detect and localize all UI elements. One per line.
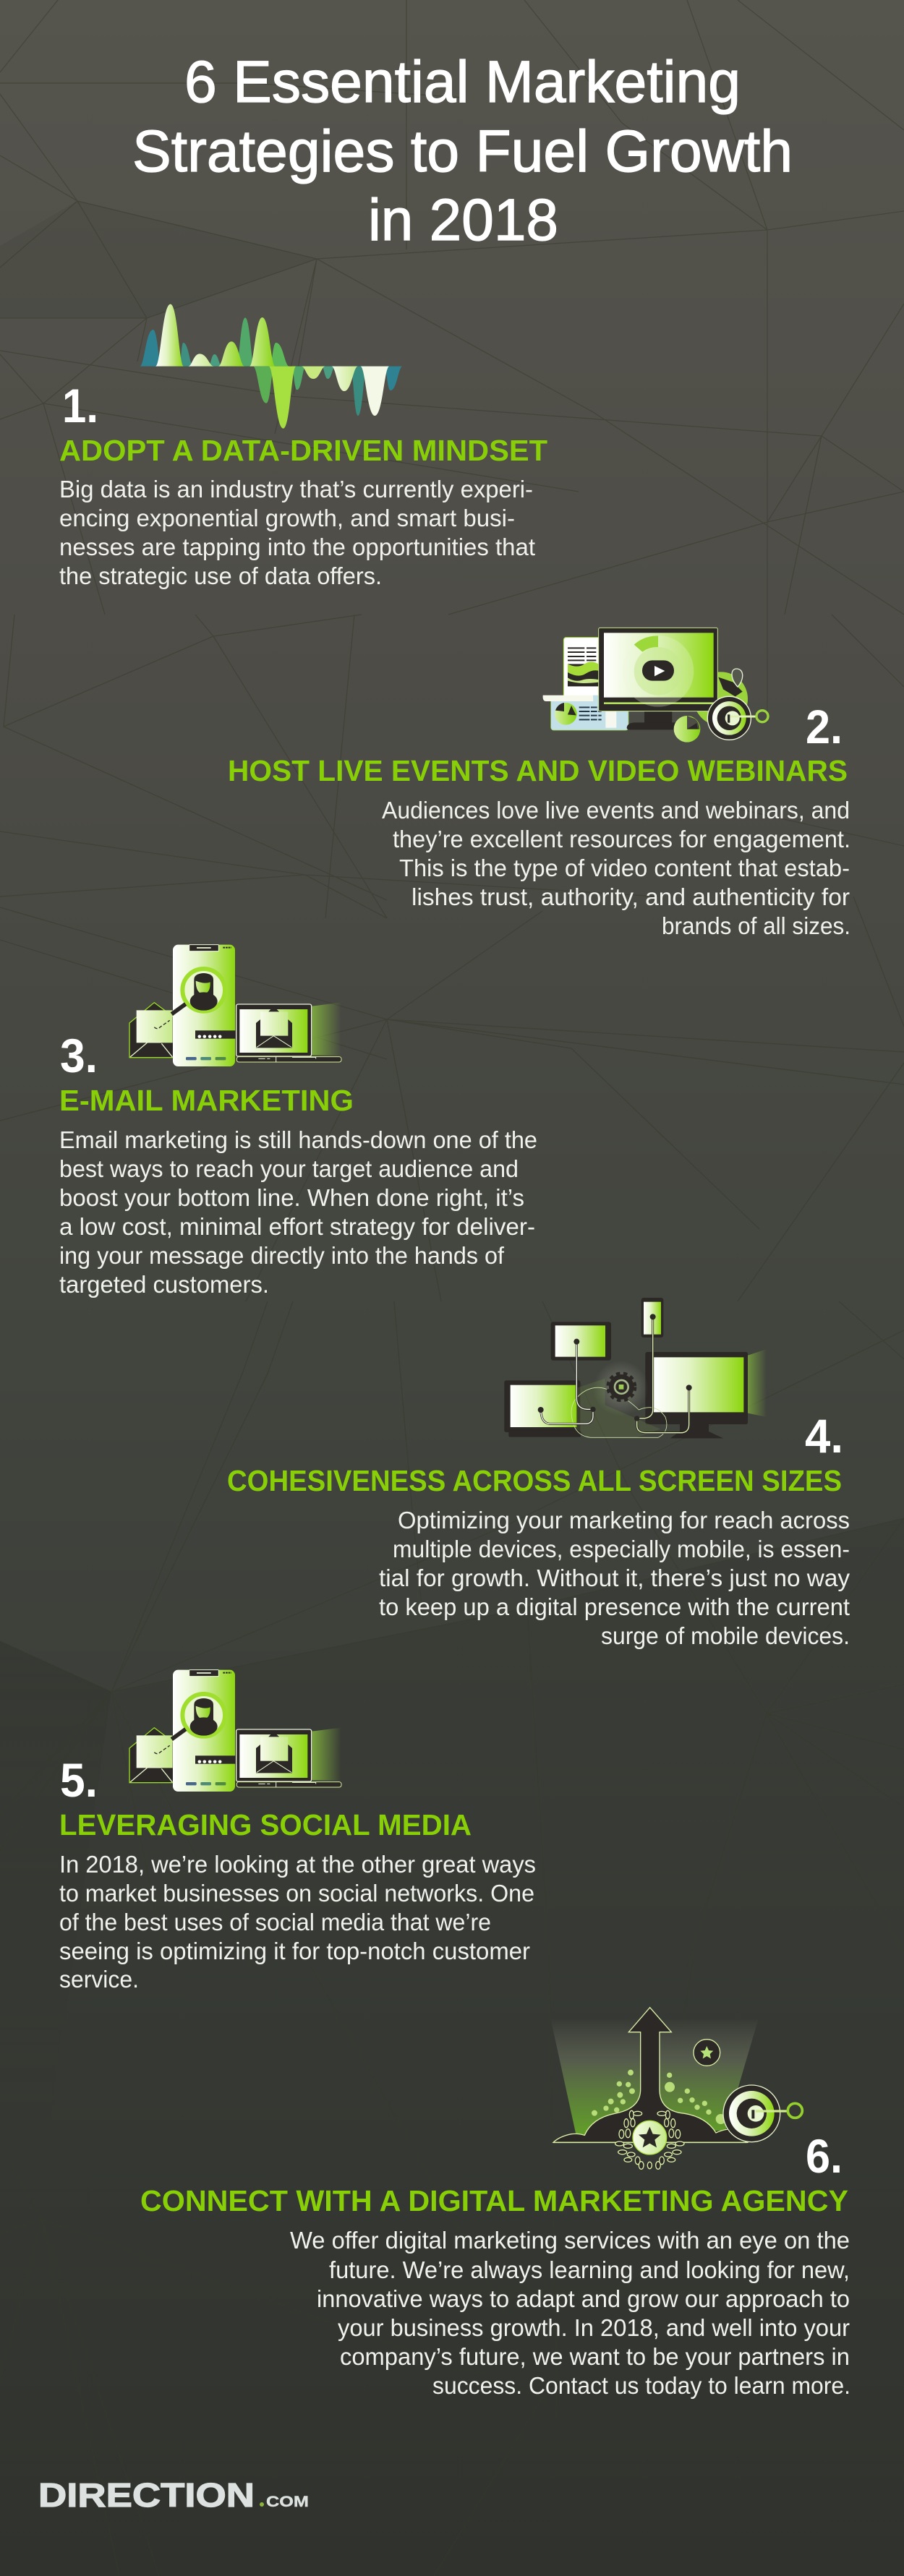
body 2	[382, 797, 850, 939]
body 3: targeted customers.	[59, 1271, 269, 1298]
body 4: tial for growth. Without it, there’s just no way	[379, 1565, 850, 1591]
body 6: company’s future, we want to be your partners in	[340, 2343, 850, 2370]
number 5: 5.	[60, 1753, 98, 1807]
icon: phone and email envelopes repeat	[129, 1670, 341, 1792]
title: Strategies to Fuel Growth	[132, 119, 793, 184]
body 4	[379, 1507, 850, 1649]
heading 6: CONNECT WITH A DIGITAL MARKETING AGENCY	[140, 2184, 848, 2217]
body 3: best ways to reach your target audience and	[59, 1155, 519, 1182]
body 3: Email marketing is still hands-down one of the	[59, 1126, 537, 1153]
body 3: a low cost, minimal effort strategy for deliver-	[59, 1213, 535, 1240]
title	[132, 49, 793, 253]
icon: phone and email envelopes	[129, 945, 341, 1066]
body 5	[59, 1851, 536, 1993]
panel: section 6 agency	[140, 2008, 850, 2399]
body 2: This is the type of video content that estab-	[399, 855, 850, 881]
icon: data waveform	[140, 304, 403, 429]
body 2: lishes trust, authority, and authenticity for	[412, 883, 850, 910]
panel: section 4 screen sizes	[227, 1298, 850, 1649]
body 6: your business growth. In 2018, and well into your	[338, 2314, 850, 2341]
body 5: seeing is optimizing it for top-notch customer	[59, 1938, 530, 1964]
body 6: future. We’re always learning and looking for new,	[329, 2256, 850, 2283]
body 5: service.	[59, 1966, 139, 1993]
number 4: 4.	[805, 1409, 843, 1463]
body 5: to market businesses on social networks. One	[59, 1880, 534, 1907]
heading 5: LEVERAGING SOCIAL MEDIA	[59, 1808, 472, 1841]
panel: section 3 email marketing	[59, 945, 537, 1298]
body 6	[290, 2227, 850, 2399]
logo: direction.com: DIRECTION	[38, 2476, 255, 2514]
body 2: Audiences love live events and webinars, and	[382, 797, 850, 823]
heading 4: COHESIVENESS ACROSS ALL SCREEN SIZES	[227, 1464, 842, 1497]
body 6: We offer digital marketing services with an eye on the	[290, 2227, 850, 2254]
number 3: 3.	[60, 1029, 98, 1082]
title: 6 Essential Marketing	[184, 49, 741, 115]
heading 1: ADOPT A DATA-DRIVEN MINDSET	[59, 434, 547, 467]
heading 2: HOST LIVE EVENTS AND VIDEO WEBINARS	[228, 754, 848, 787]
body 2: brands of all sizes.	[662, 912, 850, 939]
icon part: wreath	[615, 2110, 684, 2169]
icon: connected screens	[504, 1298, 767, 1438]
panel: section 5 social media	[59, 1670, 536, 1993]
logo: direction.com	[38, 2476, 309, 2514]
body 4: multiple devices, especially mobile, is essen-	[393, 1536, 850, 1562]
number 6: 6.	[806, 2129, 843, 2183]
body 3: boost your bottom line. When done right, it’s	[59, 1184, 524, 1211]
body 3	[59, 1126, 537, 1298]
number 2: 2.	[806, 700, 843, 753]
body 1: Big data is an industry that’s currently experi-	[59, 476, 533, 502]
body 1: encing exponential growth, and smart busi-	[59, 505, 515, 531]
body 5: In 2018, we’re looking at the other great ways	[59, 1851, 536, 1878]
body 1: nesses are tapping into the opportunities that	[59, 534, 535, 560]
body 4: Optimizing your marketing for reach across	[398, 1507, 850, 1533]
body 6: innovative ways to adapt and grow our approach to	[317, 2285, 850, 2312]
icon: growth arrow with target and wreath	[551, 2008, 802, 2169]
title: in 2018	[368, 187, 558, 253]
panel: section 1 data-driven mindset	[59, 304, 547, 589]
number 1: 1.	[62, 379, 98, 432]
icon: video webinar monitor	[543, 628, 768, 743]
body 2: they’re excellent resources for engagement.	[393, 826, 850, 852]
body 4: to keep up a digital presence with the current	[379, 1593, 850, 1620]
heading 3: E-MAIL MARKETING	[59, 1084, 354, 1117]
body 1	[59, 476, 535, 589]
body 1: the strategic use of data offers.	[59, 562, 382, 589]
body 4: surge of mobile devices.	[601, 1622, 850, 1649]
logo: direction.com: COM	[266, 2494, 309, 2510]
body 3: ing your message directly into the hands of	[59, 1242, 505, 1269]
body 6: success. Contact us today to learn more.	[432, 2372, 850, 2399]
body 5: of the best uses of social media that we’re	[59, 1909, 491, 1935]
panel: section 2 live events	[228, 628, 850, 939]
